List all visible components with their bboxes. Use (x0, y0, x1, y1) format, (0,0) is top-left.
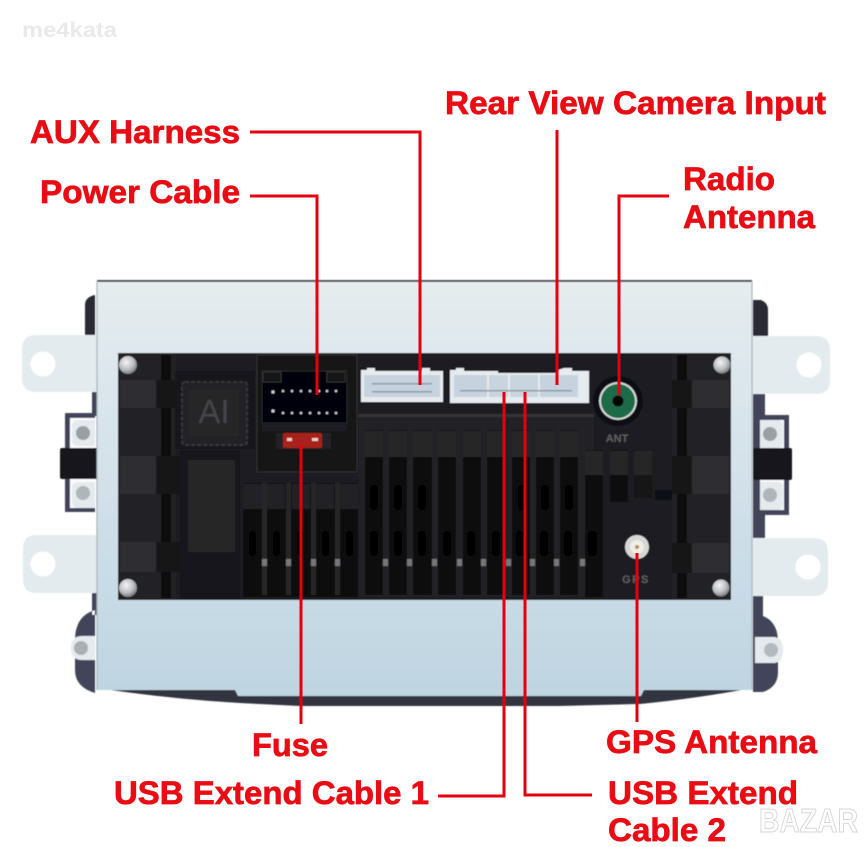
radio antenna socket: ANT (606, 433, 629, 445)
AI logo block: AI (198, 393, 230, 430)
callout: Power Cable (40, 174, 317, 395)
callout: Radio Antenna (619, 161, 815, 395)
power cable connector housing (257, 355, 357, 472)
callout: Radio Antenna: Radio (683, 161, 775, 197)
GPS antenna socket: GPS (622, 574, 650, 586)
callout: USB Extend Cable 2: USB Extend (608, 775, 798, 811)
recessed label panel (180, 450, 240, 600)
GPS antenna socket (622, 535, 650, 586)
fuse (276, 433, 331, 449)
lower-left cooling fins (243, 483, 364, 597)
callout: GPS Antenna: GPS Antenna (606, 724, 817, 760)
centre cooling fins (358, 414, 597, 597)
AUX harness white connector (361, 368, 443, 402)
radio antenna socket (593, 376, 643, 445)
left rail blocks (118, 353, 182, 600)
watermark: me4kata: me4kata (22, 19, 117, 42)
right rail blocks (672, 353, 731, 600)
callout: Rear View Camera Input: Rear View Camera Input (445, 85, 826, 121)
callout: USB Extend Cable 1 (114, 392, 504, 811)
callout: Fuse: Fuse (252, 727, 328, 763)
callout: USB Extend Cable 1: USB Extend Cable 1 (114, 775, 429, 811)
callout: AUX Harness (30, 114, 420, 385)
metal plate (97, 281, 752, 696)
callout: USB Extend Cable 2: Cable 2 (608, 812, 726, 847)
right cooling fins (585, 450, 672, 597)
right side brackets and mounting tabs (752, 300, 830, 692)
callout: AUX Harness: AUX Harness (30, 114, 240, 150)
corner screws (119, 356, 730, 597)
black rear panel (118, 353, 731, 600)
left side brackets and mounting tabs (22, 295, 98, 693)
USB and camera white connector (450, 368, 589, 403)
callout: USB Extend Cable 2 (525, 392, 798, 847)
bottom dark bezel strip (97, 688, 752, 706)
callout: Power Cable: Power Cable (40, 174, 240, 210)
AI logo block (175, 371, 255, 449)
device: head unit rear (22, 281, 830, 706)
callout: Radio Antenna: Antenna (683, 199, 815, 235)
